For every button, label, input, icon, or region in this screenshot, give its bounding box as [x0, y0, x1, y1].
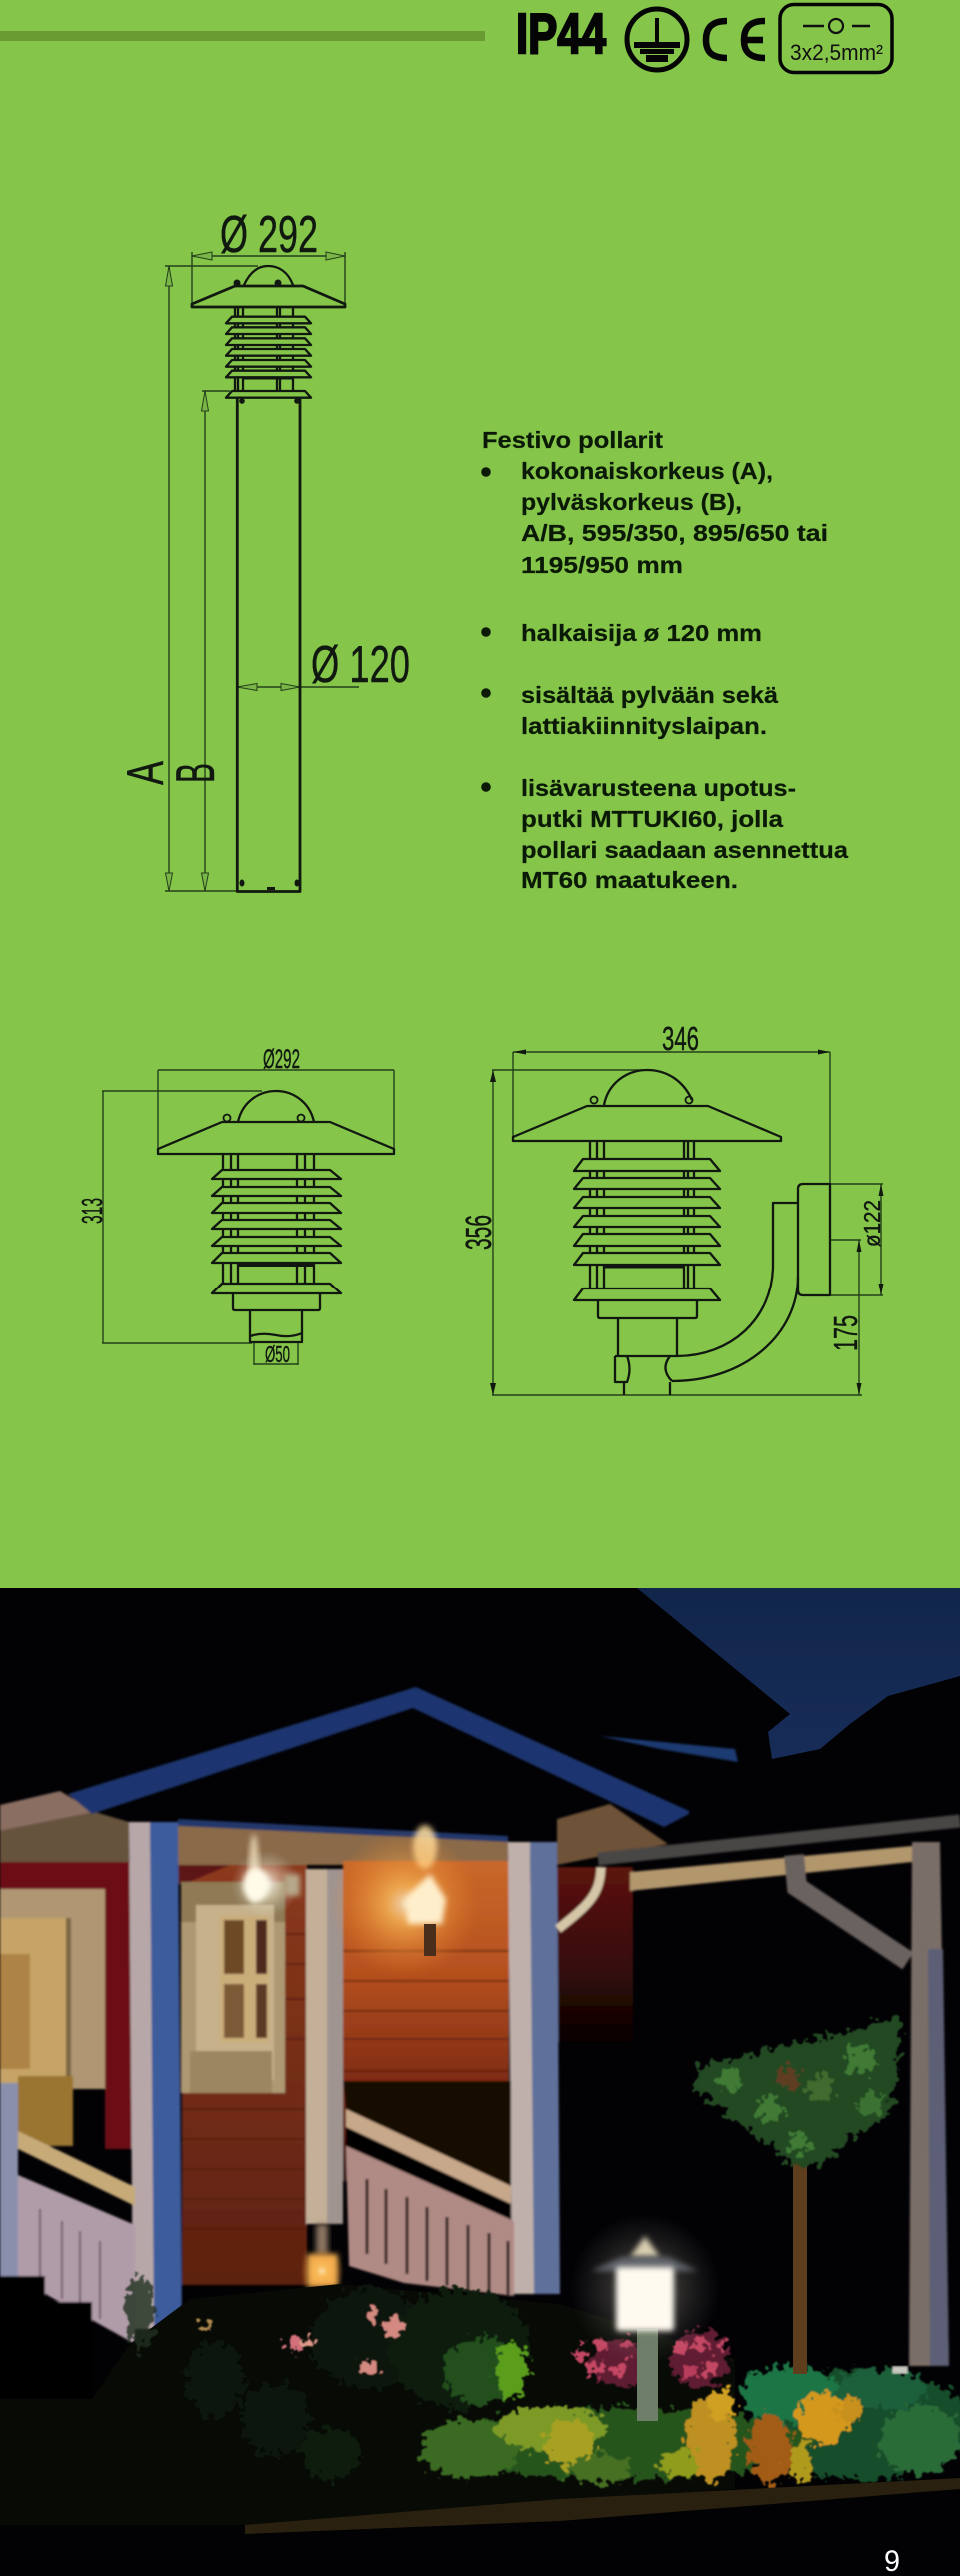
sky [637, 1588, 960, 1759]
wall lamp left [231, 1850, 300, 1918]
porch ceiling [178, 1821, 508, 1865]
small ground light [892, 2366, 908, 2374]
house structure [0, 1687, 960, 2399]
bullet list: pylväskorkeus (B), [521, 489, 742, 515]
label: height 356: 356 [458, 1215, 499, 1250]
icon: CE mark [706, 21, 765, 58]
bullet list: putki MTTUKI60, jolla [521, 806, 784, 832]
trunk [793, 2149, 807, 2374]
night background [0, 1588, 960, 2576]
porch beam [178, 1819, 508, 1842]
window frame [179, 1921, 287, 2095]
bullet list: halkaisija ø 120 mm [521, 620, 762, 646]
header bar [0, 31, 485, 41]
door frame and door [0, 1889, 105, 2089]
dimension arrows [166, 252, 345, 891]
label: width 346: 346 [662, 1020, 699, 1057]
bullet list: lisävarusteena upotus- [521, 775, 796, 801]
icon: protective earth [627, 9, 687, 70]
small lantern [300, 2224, 344, 2293]
path [245, 2478, 960, 2534]
left wall [0, 1861, 131, 1891]
wall plate [798, 1184, 830, 1295]
bullet list: MT60 maatukeen. [521, 867, 738, 893]
dimension arrows [490, 1050, 884, 1395]
label: height 313: 313 [77, 1198, 109, 1224]
front yellow plants [430, 2408, 810, 2480]
planks [182, 1934, 509, 2229]
icon: cable specification [780, 4, 892, 72]
front column [129, 1822, 158, 2329]
wall lamp right [336, 1832, 467, 1967]
porch ceiling light streaks [249, 1834, 259, 1904]
label: diameter 292: Ø292 [263, 1044, 300, 1074]
downpipe far [794, 1855, 908, 1961]
gable fascia [68, 1687, 689, 1827]
label: diameter 292: Ø 292 [220, 206, 318, 264]
bullet list: sisältää pylvään sekä [521, 682, 779, 708]
green right bed [750, 2369, 960, 2479]
gutter beam [630, 1846, 912, 1891]
drawing: post-top luminaire [77, 1044, 394, 1367]
bullet list: A/B, 595/350, 895/650 tai [521, 520, 828, 546]
heading: Festivo pollarit [482, 427, 663, 453]
garden shrubs dark [0, 2284, 735, 2525]
pole [237, 398, 300, 892]
icon: cable specification: 3x2,5mm² [790, 40, 883, 65]
bullet list: 1195/950 mm [521, 552, 683, 578]
dimension lines [102, 1070, 394, 1365]
crown [692, 2017, 900, 2167]
right column [909, 1842, 949, 2366]
label: diameter 50: Ø50 [265, 1341, 290, 1367]
right wall [557, 1867, 633, 2042]
dimension lines [492, 1052, 883, 1395]
garden foliage [126, 2276, 960, 2484]
bullet list: lattiakiinnityslaipan. [521, 713, 767, 739]
label: height 175: 175 [827, 1315, 864, 1351]
orange wall [343, 1861, 509, 2181]
bullet list: kokonaiskorkeus (A), [521, 458, 773, 484]
label: B: B [164, 763, 226, 783]
rating: IP44: IP44 [516, 2, 606, 66]
label: A: A [117, 761, 175, 785]
text block: product description [481, 427, 849, 893]
second column [508, 1842, 535, 2294]
photo: evening garden with lit bollard [0, 1588, 960, 2576]
downpipe near [558, 1867, 601, 1929]
right railing [343, 2081, 514, 2297]
wall arm [672, 1203, 798, 1381]
bullet list [481, 458, 849, 893]
roof edge sliver [600, 1736, 738, 1762]
label: diameter 122: ø122 [859, 1200, 885, 1247]
mid column [304, 1867, 329, 2227]
label: diameter 120: Ø 120 [311, 636, 410, 694]
drawing: wall-mounted luminaire [458, 1020, 885, 1395]
drawing: bollard with dimensions [117, 206, 410, 892]
main bollard lamp [580, 2223, 711, 2421]
left roof tiles [0, 1791, 95, 1831]
window glass [220, 1916, 269, 2042]
tree [692, 2017, 900, 2374]
rear wall [182, 1865, 307, 2285]
lamp head [513, 1070, 781, 1395]
dimension lines [165, 252, 359, 891]
left railing [0, 2083, 135, 2344]
dark steps [0, 2275, 94, 2323]
lamp head [158, 1091, 394, 1342]
lamp head [192, 266, 345, 404]
bullet list: pollari saadaan asennettua [521, 837, 849, 863]
